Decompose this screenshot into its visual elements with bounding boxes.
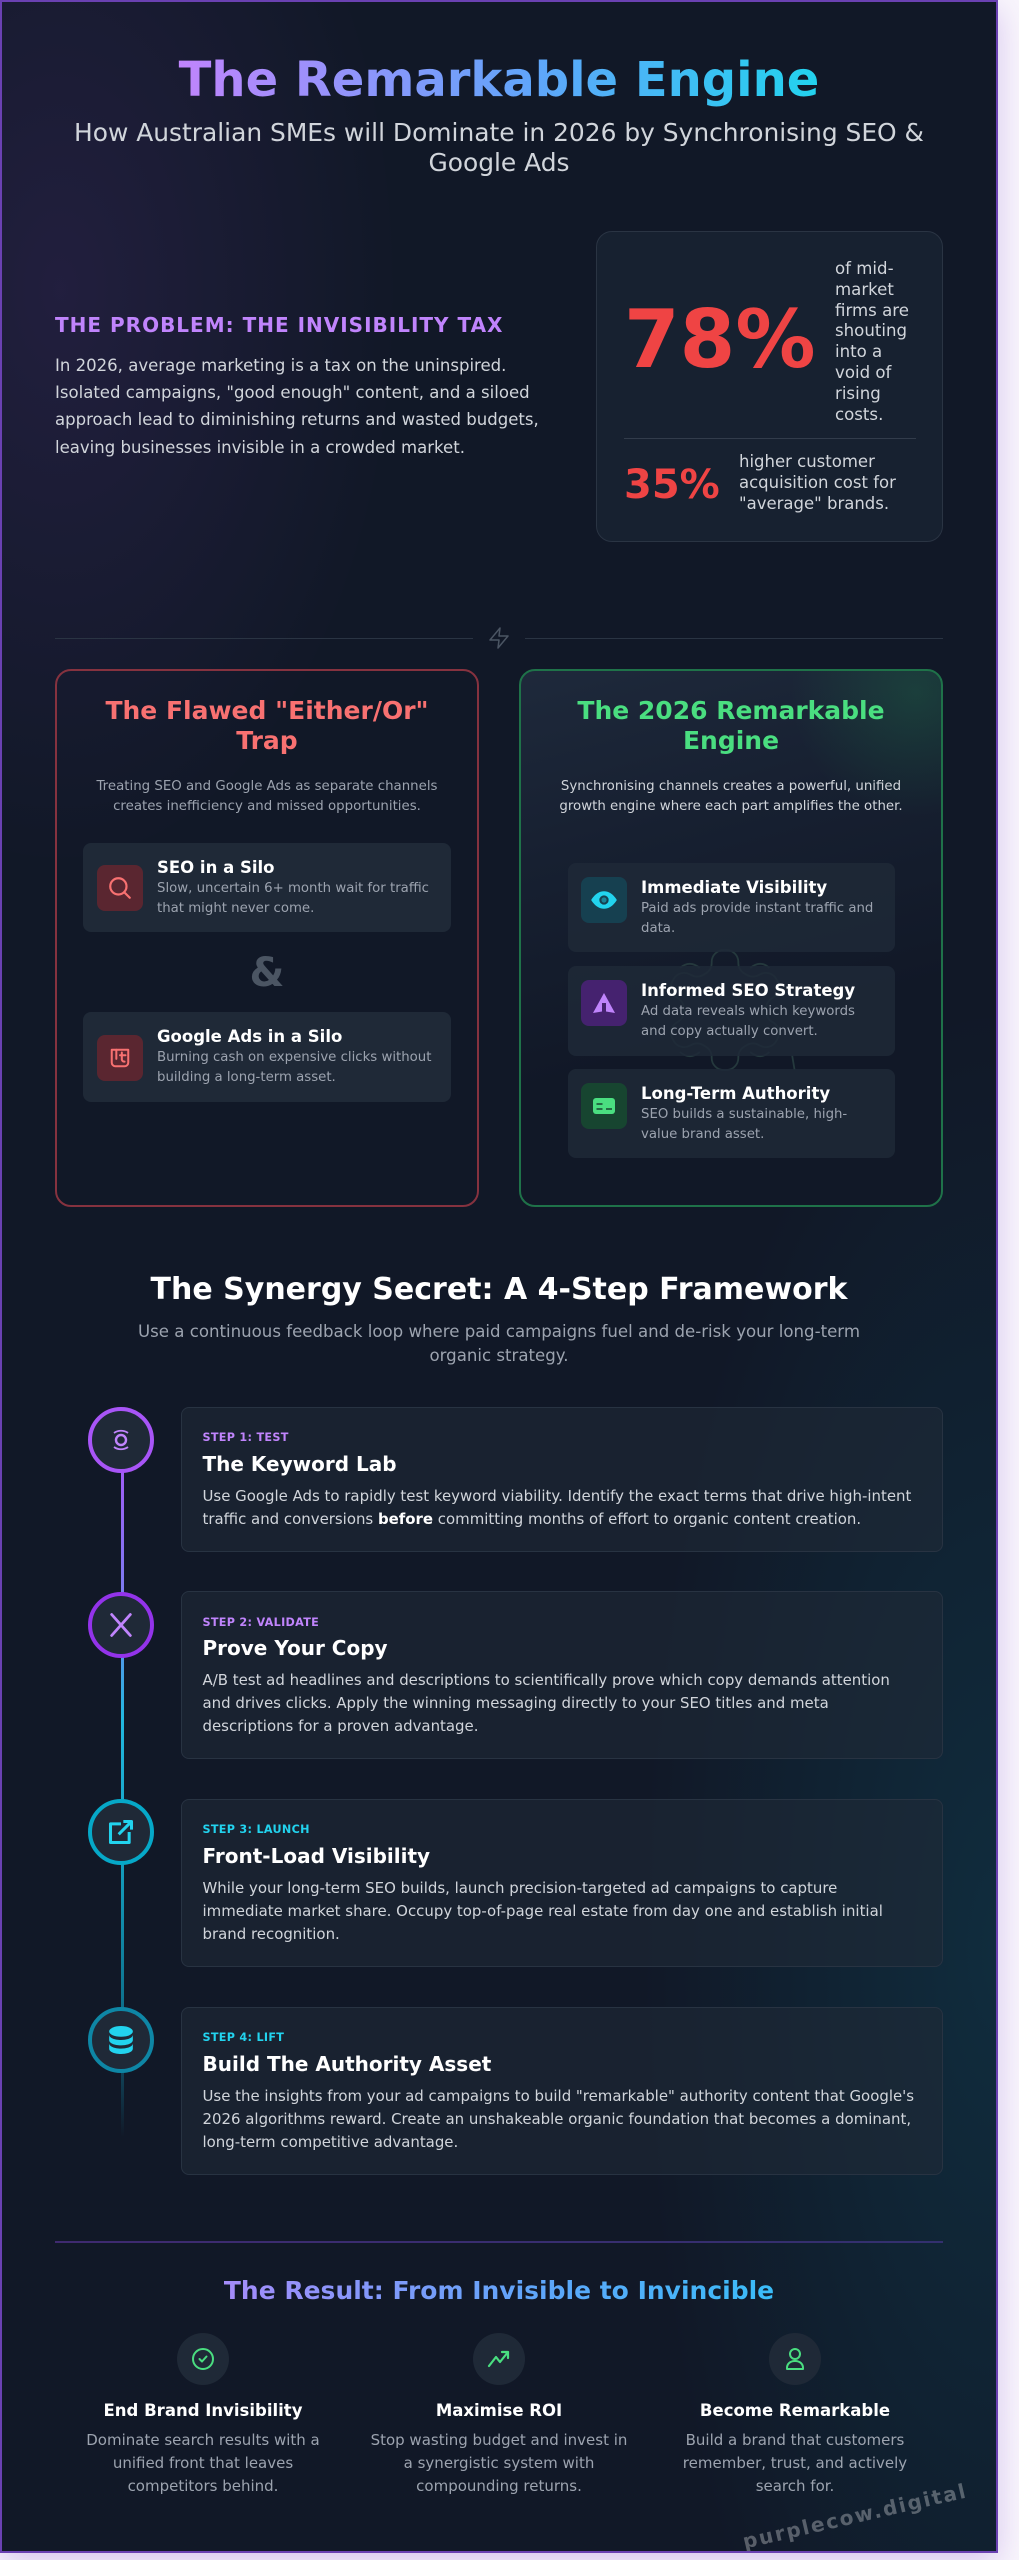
problem description: Isolated campaigns, "good enough" content, and a siloed [55,383,530,402]
icon: trending up [473,2333,525,2385]
step 1 marker icon [88,1407,154,1473]
step 3 title: Front-Load Visibility [202,1844,430,1868]
result: maximise ROI [371,2333,627,2495]
title: The Remarkable Engine [179,52,819,108]
panel: the 2026 remarkable engine [519,669,943,1207]
step 2 text: A/B test ad headlines and descriptions to scientifically prove which copy demands attention [202,1671,890,1689]
stat text: mid-market firms: market [835,280,894,299]
problem description [55,356,539,457]
stat text: acquisition cost [739,452,896,513]
text: maximise ROI: a synergistic system with [404,2454,594,2472]
text: flawed trap description [96,779,438,814]
text: immediate visibility: data. [641,921,675,936]
step 1 text: Use Google Ads to rapidly test keyword viability. Identify the exact terms that drive high-intent [202,1487,911,1505]
step 3 text: brand recognition. [202,1925,340,1943]
title: end brand invisibility: End Brand Invisibility [104,2401,302,2420]
step 1 card [181,1407,943,1552]
subtitle: How Australian SMEs will Dominate in 2026 by Synchronising SEO & [74,118,924,147]
subtitle [74,118,924,177]
timeline line [121,1440,124,2137]
icon: navigation arrow [581,980,627,1026]
result: become remarkable [683,2333,907,2495]
text: synergy description: organic strategy. [429,1346,569,1365]
step 3 label: STEP 3: LAUNCH [202,1823,310,1836]
step 2 text [202,1671,890,1735]
heading: the result: The Result: From Invisible to Invincible [224,2276,774,2305]
problem description: leaving businesses invisible in a crowded market. [55,438,465,457]
text: become remarkable: remember, trust, and actively [683,2454,907,2472]
title: SEO in a silo: SEO in a Silo [157,858,274,877]
text: end brand invisibility: Dominate search results with a [86,2431,320,2449]
icon: ads tag [97,1035,143,1081]
text: maximise ROI [371,2431,627,2495]
title: informed SEO strategy: Informed SEO Strategy [641,981,855,1000]
stat text: acquisition cost: higher customer [739,452,875,471]
text: maximise ROI: Stop wasting budget and invest in [371,2431,627,2449]
icon: faint background gear [682,952,796,1069]
heading: remarkable engine: The 2026 Remarkable [577,696,885,725]
text: long-term authority: SEO builds a sustainable, high- [641,1107,847,1122]
step 2 text: and drives clicks. Apply the winning messaging directly to your SEO titles and meta [202,1694,829,1712]
heading: remarkable engine: Engine [683,726,779,755]
step 4 card [181,2007,943,2175]
text: end brand invisibility: competitors behind. [128,2477,278,2495]
title: immediate visibility: Immediate Visibility [641,878,827,897]
step 1 label: STEP 1: TEST [202,1431,289,1444]
text: maximise ROI: compounding returns. [416,2477,582,2495]
text: SEO in a silo [157,881,429,916]
text: immediate visibility: Paid ads provide instant traffic and [641,901,873,916]
text: end brand invisibility [86,2431,320,2495]
step 4 label: STEP 4: LIFT [202,2031,284,2044]
stat text: mid-market firms: into a [835,342,882,361]
ampersand: & [250,950,284,996]
watermark: purplecow.digital [740,2478,970,2554]
heading: synergy secret: The Synergy Secret: A 4-Step Framework [151,1272,847,1307]
step 2 marker icon [88,1592,154,1658]
step 1 text: traffic and conversions before committing months of effort to organic content creation. [202,1510,861,1528]
text: SEO in a silo: that might never come. [157,901,314,916]
step 3 text: immediate market share. Occupy top-of-page real estate from day one and establish initial [202,1902,883,1920]
step 1 title: The Keyword Lab [202,1452,397,1476]
stat text: acquisition cost: "average" brands. [739,494,889,513]
heading: flawed trap: Trap [236,726,298,755]
step 3 marker icon [88,1799,154,1865]
section divider with lightning icon [55,627,943,649]
panel: the flawed either/or trap [55,669,479,1207]
step 4 text: 2026 algorithms reward. Create an unshakeable organic foundation that becomes a dominant, [202,2110,911,2128]
text: SEO in a silo: Slow, uncertain 6+ month wait for traffic [157,881,429,896]
text: long-term authority [641,1107,847,1142]
result: end brand invisibility [86,2333,320,2495]
stat text: mid-market firms: costs. [835,405,883,424]
stat: 78 percent: 78% [624,293,815,386]
card: Google Ads in a silo [83,1012,451,1102]
text: long-term authority: value brand asset. [641,1127,764,1142]
title: maximise ROI: Maximise ROI [436,2401,562,2420]
title: long-term authority: Long-Term Authority [641,1084,830,1103]
title: Google Ads in a silo: Google Ads in a Silo [157,1027,342,1046]
step 4 text: long-term competitive advantage. [202,2133,458,2151]
text: informed SEO strategy: and copy actually convert. [641,1024,818,1039]
text: become remarkable: Build a brand that customers [686,2431,904,2449]
text: synergy description [138,1322,860,1365]
text: flawed trap description: creates inefficiency and missed opportunities. [113,799,421,814]
text: Google Ads in a silo: building a long-term asset. [157,1070,336,1085]
stat divider [624,438,916,439]
stat text: mid-market firms: of mid- [835,259,894,278]
subtitle: Google Ads [428,148,570,177]
step 4 text: Use the insights from your ad campaigns to build "remarkable" authority content that Google's [202,2087,914,2105]
text: immediate visibility [641,901,873,936]
stat text: mid-market firms: firms are [835,301,909,320]
heading: flawed trap [105,696,429,755]
panel: statistics card [596,231,943,542]
stat text: mid-market firms: shouting [835,321,907,340]
icon: check circle [177,2333,229,2385]
text: become remarkable: search for. [756,2477,834,2495]
stat text: mid-market firms: void of [835,363,891,382]
text: Google Ads in a silo: Burning cash on expensive clicks without [157,1050,431,1065]
card: informed SEO strategy [568,966,895,1056]
results divider [55,2241,943,2243]
step 3 text: While your long-term SEO builds, launch precision-targeted ad campaigns to capture [202,1879,837,1897]
problem description: In 2026, average marketing is a tax on the uninspired. [55,356,506,375]
step 4 text [202,2087,914,2151]
card: immediate visibility [568,863,895,952]
step 4 marker icon [88,2007,154,2073]
step 3 card [181,1799,943,1967]
heading: the problem: THE PROBLEM: THE INVISIBILITY TAX [55,313,503,337]
heading: flawed trap: The Flawed "Either/Or" [105,696,429,725]
text: Google Ads in a silo [157,1050,432,1085]
step 2 title: Prove Your Copy [202,1636,388,1660]
heading: remarkable engine [577,696,885,755]
icon: eye [581,877,627,923]
problem description: approach lead to diminishing returns and wasted budgets, [55,410,539,429]
step 2 text: descriptions for a proven advantage. [202,1717,478,1735]
text: remarkable engine description [559,779,903,814]
text: remarkable engine description: growth engine where each part amplifies the other. [559,799,903,814]
step 3 text [202,1879,883,1943]
icon: user [769,2333,821,2385]
step 4 title: Build The Authority Asset [202,2052,491,2076]
icon: search [97,865,143,911]
text: informed SEO strategy [641,1004,855,1039]
text: informed SEO strategy: Ad data reveals which keywords [641,1004,855,1019]
card: long-term authority [568,1069,895,1158]
text: remarkable engine description: Synchronising channels creates a powerful, unified [561,779,901,794]
title: become remarkable: Become Remarkable [700,2401,890,2420]
text: synergy description: Use a continuous feedback loop where paid campaigns fuel and de-risk your long-term [138,1322,860,1341]
stat: 35 percent: 35% [624,462,720,508]
icon: green id card [581,1083,627,1129]
stat text: mid-market firms: rising [835,384,881,403]
step 1 text [202,1487,911,1528]
stat text: mid-market firms [835,259,909,424]
card: SEO in a silo [83,843,451,932]
text: end brand invisibility: unified front that leaves [113,2454,293,2472]
text: become remarkable [683,2431,907,2495]
text: flawed trap description: Treating SEO and Google Ads as separate channels [96,779,438,794]
stat text: acquisition cost: acquisition cost for [739,473,896,492]
step 2 card [181,1591,943,1759]
step 2 label: STEP 2: VALIDATE [202,1616,319,1629]
